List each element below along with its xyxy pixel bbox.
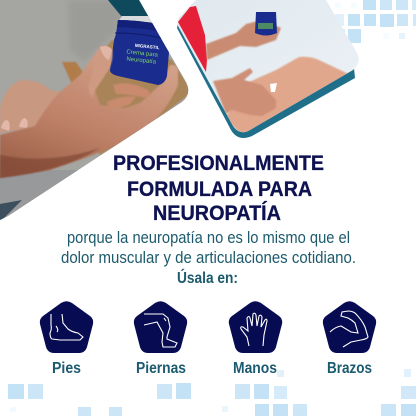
tan background behind hand xyxy=(94,40,188,156)
wrist shade xyxy=(0,148,100,178)
teal backdrop xyxy=(108,0,150,17)
icon: foot xyxy=(40,301,93,353)
shirt xyxy=(0,0,200,220)
jar: Neuropatía xyxy=(126,56,157,66)
jar xyxy=(110,20,170,85)
title: PROFESIONALMENTE xyxy=(113,152,324,175)
description text xyxy=(61,229,356,267)
jar: MIGRASTIL xyxy=(135,43,160,50)
item: Brazos xyxy=(323,301,376,377)
jar: Crema para xyxy=(126,49,159,59)
icon: flexed arm xyxy=(323,301,376,353)
decorative squares: top right xyxy=(335,0,416,43)
description text: dolor muscular y de articulaciones cotidiano. xyxy=(61,249,356,267)
icon: hand xyxy=(229,301,282,353)
teal frame xyxy=(177,18,355,138)
item: Piernas xyxy=(134,301,187,377)
hand on leg xyxy=(213,68,276,116)
label: Pies xyxy=(52,360,81,377)
label: Manos xyxy=(233,360,277,377)
thumb over jar xyxy=(88,46,112,98)
small jar xyxy=(255,12,277,36)
icon: leg xyxy=(134,301,187,353)
title xyxy=(113,152,324,225)
label: Brazos xyxy=(327,360,372,377)
decorative squares: bottom xyxy=(8,369,416,416)
title: FORMULADA PARA xyxy=(127,178,312,201)
cream xyxy=(270,83,277,92)
photo: cream applied to leg xyxy=(177,0,359,138)
title: NEUROPATÍA xyxy=(153,202,281,225)
item: Pies xyxy=(40,301,93,377)
left fingers xyxy=(0,80,60,134)
photo: hand holding jar xyxy=(0,0,200,222)
leg xyxy=(225,57,353,136)
raised arm xyxy=(206,20,281,60)
red shirt xyxy=(178,6,207,72)
forearm and hand xyxy=(0,46,178,178)
description text: porque la neuropatía no es lo mismo que el xyxy=(67,229,350,247)
curled fingers xyxy=(113,83,150,98)
label: Piernas xyxy=(136,360,186,377)
item: Manos xyxy=(229,301,282,377)
white gap under knee xyxy=(293,97,314,110)
subheading: Úsala en: xyxy=(177,269,238,287)
